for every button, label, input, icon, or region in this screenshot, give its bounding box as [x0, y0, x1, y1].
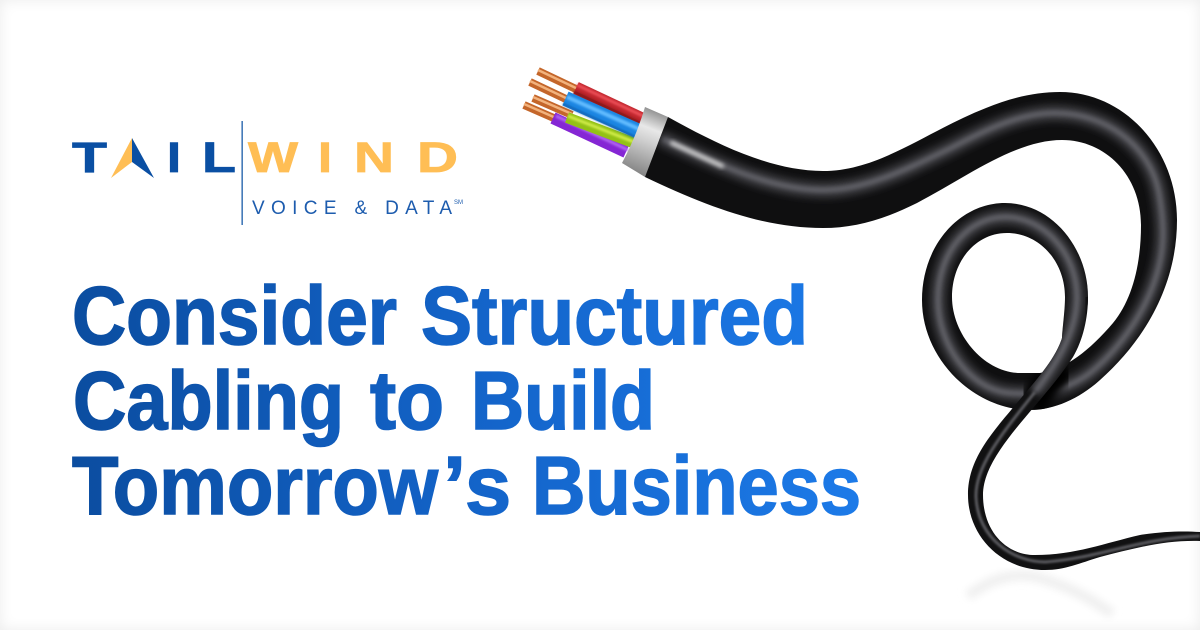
- metal sleeve: [622, 107, 668, 177]
- title: Business: [532, 439, 861, 532]
- logo word: WIND: N: [354, 134, 394, 182]
- wire: purple: [553, 116, 628, 152]
- cable: thick jacket with loop: [645, 92, 1177, 410]
- service mark: SM: [454, 200, 463, 206]
- title: to: [370, 354, 444, 447]
- wire: red: [574, 85, 643, 123]
- title: Tomorrow: [72, 439, 438, 532]
- cable: thin tail: [968, 270, 1200, 570]
- logo word: WIND: D: [417, 134, 458, 182]
- illustration: stripped cable: [524, 70, 668, 177]
- title: ’s: [443, 439, 511, 532]
- logo word: TAIL: L: [202, 134, 236, 182]
- logo word: TAIL: I: [167, 134, 181, 182]
- title: Structured: [421, 269, 808, 362]
- copper conductors: [524, 70, 578, 119]
- logo word: WIND: I: [318, 134, 332, 182]
- crossing shadow: [1030, 365, 1062, 405]
- logo divider: [242, 121, 243, 225]
- icon: arrow forming the letter A: [111, 138, 154, 178]
- title: Build: [471, 354, 655, 447]
- wire: blue: [563, 97, 639, 137]
- title: [72, 269, 861, 532]
- logo word: WIND: W: [248, 134, 299, 182]
- logo word: TAIL: T: [72, 134, 107, 182]
- logo tagline: VOICE & DATA: [252, 198, 452, 219]
- cable reflection: [968, 575, 1112, 614]
- logo word: TAIL: [72, 134, 236, 182]
- logo: Tailwind Voice & Data: [72, 121, 463, 225]
- wire: green: [567, 116, 634, 143]
- title: Cabling: [73, 354, 344, 447]
- logo word: WIND: [248, 134, 458, 182]
- title: Consider: [72, 269, 397, 362]
